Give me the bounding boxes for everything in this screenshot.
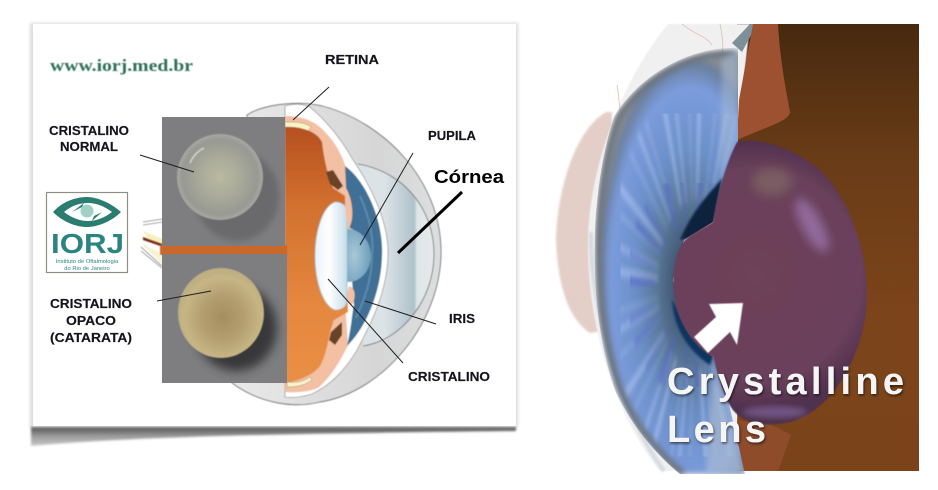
- pupil shadow, upper: [680, 178, 722, 240]
- caption: Crystalline Lens: Lens: [667, 409, 766, 451]
- cream strips: [285, 122, 312, 387]
- iris dark rim: [599, 54, 737, 474]
- inset: opaque lens (cataract): [162, 254, 287, 383]
- diagram labels: CRISTALINO: [49, 124, 129, 138]
- red-brown ciliary muscle, top: [737, 24, 790, 140]
- card shadow: [31, 426, 516, 446]
- back-of-eye fragment left of insets: [141, 219, 163, 268]
- icon: eye emblem: [53, 197, 121, 227]
- iris light fibres: [633, 142, 757, 428]
- upper pale edge: [720, 48, 738, 180]
- diagram labels: (CATARATA): [50, 331, 132, 345]
- retina band: [285, 116, 352, 392]
- pupil chamber: [347, 229, 371, 282]
- logo: IORJ: do Rio de Janeiro: [64, 266, 110, 272]
- brown eye interior: [737, 24, 919, 471]
- eye cross-section diagram: [141, 103, 441, 405]
- lens bottom sheen: [743, 406, 807, 418]
- diagram labels: CRISTALINO: [408, 370, 490, 384]
- card background: [33, 24, 516, 426]
- lens soft sheen: [752, 168, 792, 196]
- iris blue: [345, 166, 382, 346]
- logo wordmark: IORJ: [51, 228, 124, 259]
- vitreous orange: [285, 127, 348, 383]
- label leader lines: [140, 87, 462, 363]
- logo: IORJ: [46, 192, 128, 272]
- white outer band: [285, 104, 388, 397]
- diagram labels: Córnea: [434, 166, 505, 187]
- lower iris pale edge: [706, 360, 745, 474]
- panel: eye anatomy card: [30, 23, 518, 446]
- arrow pointing to lens: [694, 303, 743, 353]
- peach iris root: [345, 188, 355, 305]
- blood vessels: [617, 24, 723, 118]
- diagram labels: [49, 53, 505, 384]
- cornea outer arc: [358, 164, 434, 346]
- logo subtitle: Instituto de Oftalmologia: [56, 259, 119, 265]
- sclera highlights: [591, 232, 664, 471]
- orange stripe between insets: [160, 245, 287, 255]
- lens body: [673, 141, 867, 424]
- diagram labels: OPACO: [66, 314, 116, 328]
- diagram labels: NORMAL: [60, 140, 118, 154]
- diagram labels: PUPILA: [428, 129, 476, 143]
- lens: [315, 202, 347, 310]
- ciliary body: [326, 170, 343, 345]
- panel: crystalline lens illustration: [556, 24, 919, 474]
- grey ligament: [732, 24, 757, 52]
- iris: [599, 48, 757, 474]
- diagram labels: IRIS: [449, 312, 475, 326]
- sclera: [232, 103, 441, 405]
- eyelid / cornea bulge: [556, 112, 612, 333]
- red-brown ciliary muscle, bottom: [737, 420, 791, 471]
- caption: Crystalline Lens: [667, 361, 904, 451]
- lens highlight: [789, 194, 835, 256]
- pupil shadow, lower: [672, 300, 715, 365]
- caption: Crystalline Lens: Crystalline: [667, 361, 904, 403]
- diagram labels: RETINA: [325, 53, 379, 67]
- sclera: [588, 24, 750, 471]
- inset: normal lens: [162, 117, 285, 246]
- website url: www.iorj.med.br: [50, 56, 194, 75]
- diagram labels: CRISTALINO: [50, 297, 132, 311]
- iris violet fibres: [640, 200, 740, 370]
